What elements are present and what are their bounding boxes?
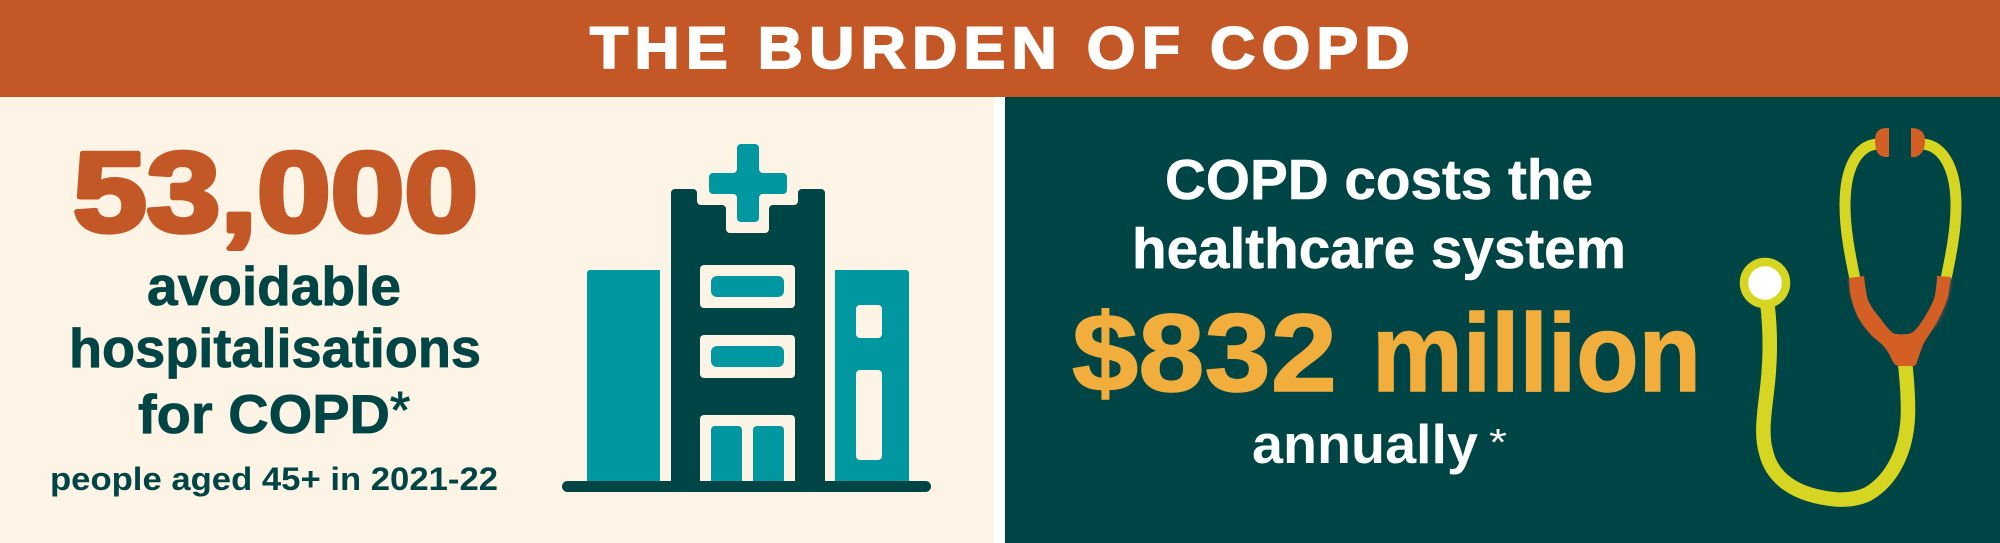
- text block: COPD costs the healthcare system: COPD costs the: [1165, 148, 1593, 212]
- right wing: [835, 270, 909, 481]
- left ear tube: [1845, 144, 1877, 279]
- text block: avoidable hospitalisations for COPD: avoidable: [147, 255, 401, 317]
- text block: COPD costs the healthcare system: [1132, 148, 1626, 281]
- asterisk: *: [390, 382, 410, 440]
- text block: COPD costs the healthcare system: healthcare system: [1132, 217, 1626, 281]
- ground line: [562, 481, 931, 492]
- right ear tube: [1923, 144, 1956, 279]
- icon: hospital building: [562, 144, 931, 492]
- main tower: [671, 189, 825, 481]
- right ear piece: [1911, 128, 1925, 157]
- big number: 53,000: 53,000: [73, 129, 478, 255]
- left wing: [587, 270, 660, 481]
- panel: right cost: [1005, 97, 2000, 543]
- title: THE BURDEN OF COPD: [590, 16, 1416, 81]
- main tube: [1763, 305, 1908, 500]
- medical cross: [709, 144, 787, 222]
- panel: title banner: [0, 0, 2000, 97]
- text block: avoidable hospitalisations for COPD: [69, 255, 481, 445]
- text block: avoidable hospitalisations for COPD: for COPD: [138, 383, 390, 445]
- entrance doors: [700, 415, 795, 481]
- upper window: [700, 265, 795, 308]
- big number: million: million: [1372, 292, 1701, 415]
- yoke: [1849, 276, 1951, 366]
- text block: annually: annually: [1252, 413, 1478, 475]
- text block: avoidable hospitalisations for COPD: hospitalisations: [69, 317, 481, 379]
- left ear piece: [1875, 128, 1889, 157]
- text block: people aged 45+ in 2021-22: people aged 45+ in 2021-22: [50, 461, 498, 497]
- asterisk: *: [1489, 422, 1507, 464]
- big number: $832: $832: [1072, 292, 1337, 415]
- yoke shadow: [1847, 278, 1953, 332]
- chest piece: [1744, 262, 1786, 304]
- panel: left hospitalisations: [0, 97, 994, 543]
- icon: stethoscope: [1744, 128, 1956, 500]
- middle window: [700, 335, 795, 378]
